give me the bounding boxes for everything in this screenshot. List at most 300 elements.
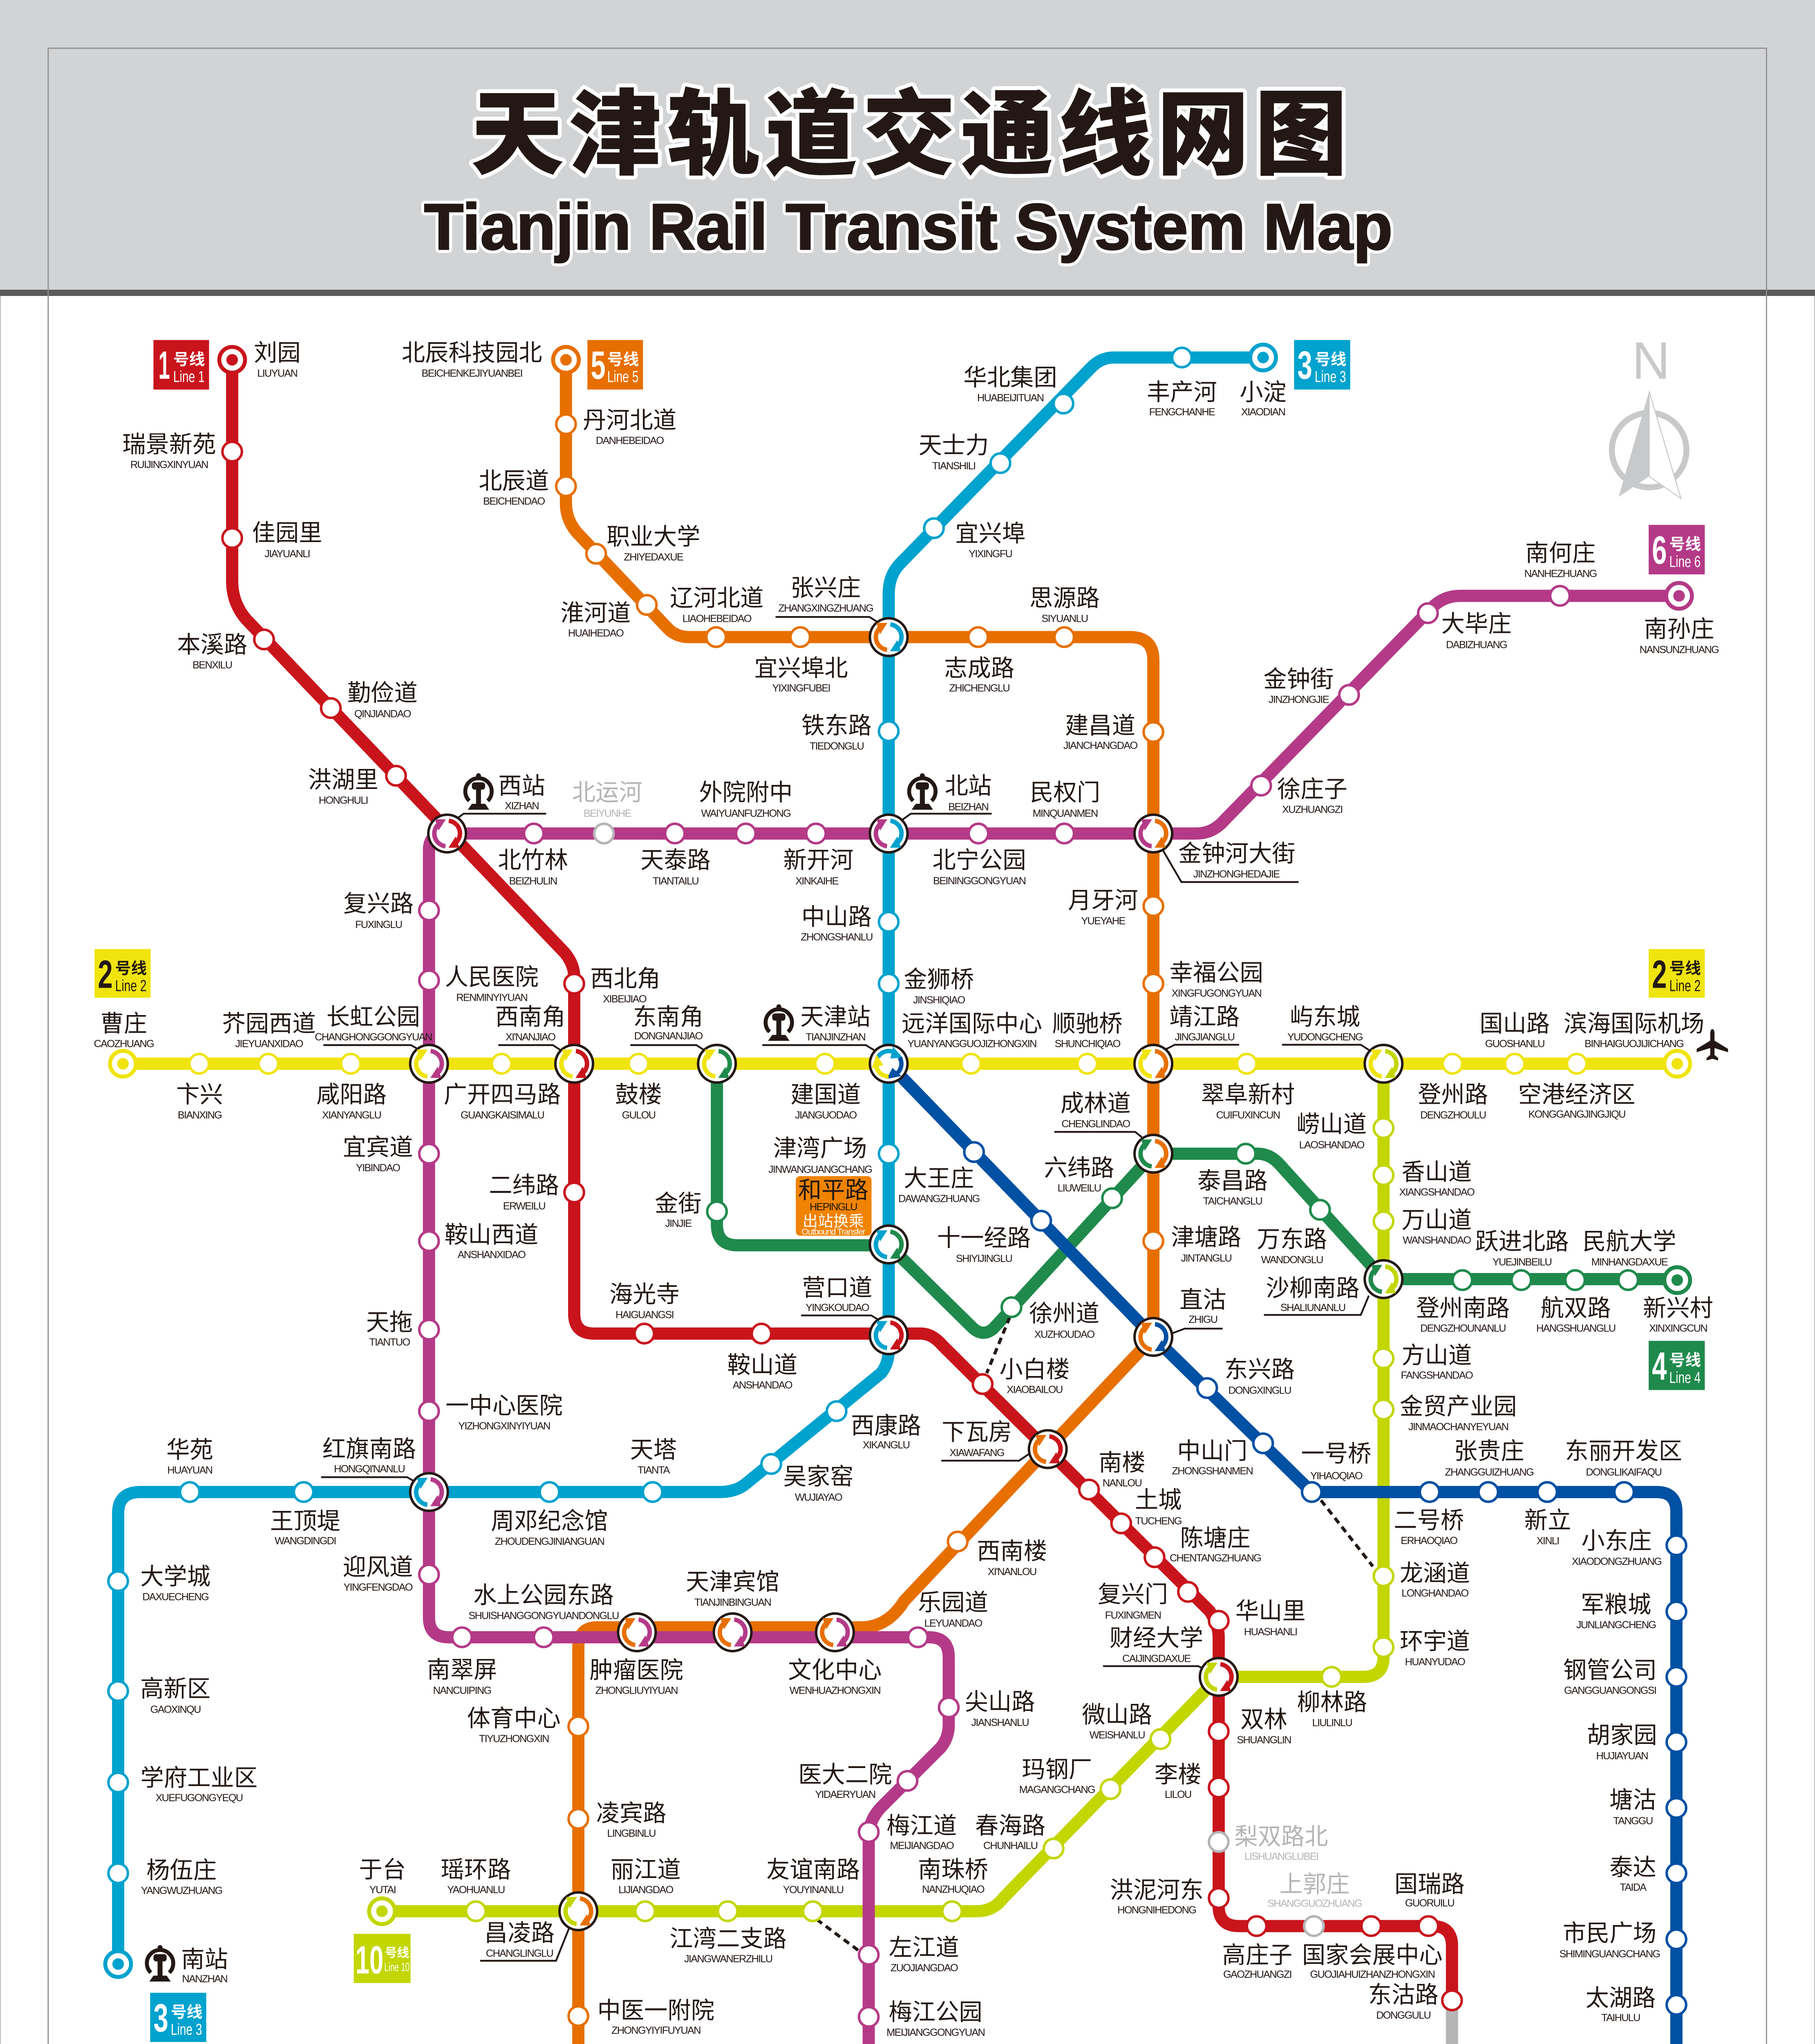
station: 淮河道: [560, 595, 656, 639]
station: 一中心医院: 一中心医院: [445, 1393, 563, 1419]
station: 大学城: DAXUECHENG: [142, 1591, 208, 1603]
station: 本溪路: BENXILU: [192, 659, 232, 671]
terminus: 刘园: LIUYUAN: [257, 368, 298, 379]
badge: line 2 left: [94, 949, 151, 998]
station: 远洋国际中心: [902, 1011, 1042, 1074]
station: 凌宾路: [568, 1800, 667, 1839]
station: 淮河道: 淮河道: [560, 600, 631, 626]
station: 建昌道: JIANCHANGDAO: [1063, 740, 1137, 751]
station: 徐庄子: 徐庄子: [1277, 776, 1347, 802]
station: 中医一附院: [568, 1998, 714, 2036]
badge: line 6 top: 6: [1652, 528, 1667, 572]
terminus: 曹庄: [94, 1011, 154, 1077]
terminus: 新兴村: [1643, 1267, 1713, 1334]
station: 大王庄: [898, 1142, 984, 1204]
station: 金钟街: JINZHONGJIE: [1269, 694, 1329, 706]
interchange: 文化中心: [788, 1614, 882, 1697]
interchange: 昌凌路: CHANGLINGLU: [486, 1948, 553, 1959]
station: 学府工业区: 学府工业区: [141, 1765, 257, 1791]
station: 北运河 (not open): [572, 780, 642, 843]
station: 南翠屏: NANCUIPING: [433, 1685, 491, 1697]
station: 高庄子: [1222, 1916, 1292, 1980]
station: 金街: JINJIE: [665, 1218, 692, 1229]
station: 国家会展中心: GUOJIAHUIZHANZHONGXIN: [1310, 1969, 1435, 1980]
interchange: 北站: [870, 773, 991, 852]
station: 梅江公园: 梅江公园: [889, 1999, 982, 2026]
station: 天士力: [919, 433, 1010, 473]
badge: line 2 left: 2: [98, 952, 113, 996]
station: 瑞景新苑: [122, 431, 242, 471]
station: 鞍山道: 鞍山道: [727, 1352, 797, 1378]
interchange: 和平路 with outbound-transfer tag: [796, 1176, 907, 1263]
station: 尖山路: JIANSHANLU: [971, 1717, 1029, 1728]
station: 华山里: [1209, 1598, 1306, 1638]
station: 南何庄: 南何庄: [1525, 540, 1596, 567]
terminus: 南站: 南站: [181, 1947, 228, 1973]
station: 东兴路: 东兴路: [1224, 1357, 1295, 1383]
terminus: 北辰科技园北: 北辰科技园北: [402, 340, 542, 366]
station: 佳园里: JIAYUANLI: [264, 548, 310, 560]
station: 微山路: WEISHANLU: [1090, 1730, 1145, 1741]
interchange: 金钟河大街: [1135, 815, 1298, 882]
interchange: 红旗南路: 红旗南路: [322, 1436, 416, 1462]
line 9 path: [888, 1064, 1676, 2044]
station: 周邓纪念馆: ZHOUDENGJINIANGUAN: [495, 1536, 604, 1547]
interchange: 红旗南路: [321, 1436, 448, 1511]
station: 丰产河: 丰产河: [1147, 379, 1217, 406]
station: 瑶环路: 瑶环路: [441, 1857, 511, 1883]
station: 万东路: [1257, 1200, 1330, 1266]
station: 医大二院: [798, 1762, 917, 1800]
station: 瑶环路: [441, 1857, 511, 1921]
terminus: 于台: YUTAI: [369, 1884, 396, 1896]
station: 登州南路: 登州南路: [1416, 1295, 1510, 1321]
station: 宜宾道: 宜宾道: [343, 1134, 413, 1161]
station: 梅江公园: MEIJIANGGONGYUAN: [886, 2027, 985, 2038]
interchange: 天津站: [762, 1004, 909, 1085]
station: 咸阳路: [316, 1054, 387, 1121]
interchange stations: [315, 575, 1402, 2044]
station: 洪泥河东: [1110, 1877, 1229, 1916]
station: 塘沽: [1609, 1787, 1686, 1827]
badge: line 3 top: Line 3: [1315, 368, 1346, 386]
interchange: 营口道: YINGKOUDAO: [806, 1302, 869, 1313]
interchange: 和平路 with outbound-transfer tag: Outbound Transfer: [802, 1227, 865, 1237]
station: 咸阳路: 咸阳路: [316, 1082, 387, 1108]
station: 国山路: [1479, 1011, 1550, 1074]
station: 南珠桥: 南珠桥: [918, 1857, 988, 1883]
line badges: [94, 340, 1705, 2044]
station: 西康路: XIKANGLU: [863, 1439, 910, 1451]
station: 柳林路: LIULINLU: [1312, 1717, 1352, 1729]
interchange: 西站: XIZHAN: [505, 800, 539, 812]
interchange: 天津站: 天津站: [800, 1004, 871, 1030]
station: 翠阜新村: [1201, 1054, 1295, 1121]
line 2 stations: [94, 1011, 1728, 1121]
station: 南珠桥: NANZHUQIAO: [922, 1884, 985, 1895]
station: 华北集团: HUABEIJITUAN: [977, 392, 1044, 404]
line 1 unopened section: [1450, 2000, 1454, 2044]
interchange: 张兴庄: 张兴庄: [790, 575, 861, 601]
station: 天士力: 天士力: [919, 433, 989, 459]
station: 鼓楼: [615, 1054, 662, 1121]
terminus: 小淀: [1240, 345, 1287, 418]
station: 二号桥: ERHAOQIAO: [1401, 1535, 1457, 1546]
line 9 stations: [898, 1142, 1689, 2044]
interchange: 财经大学: 财经大学: [1110, 1625, 1203, 1651]
station: 李楼: [1155, 1762, 1229, 1800]
station: 宜兴埠北: YIXINGFUBEI: [772, 682, 830, 694]
station: 宜宾道: [343, 1134, 439, 1174]
station: 天塔: 天塔: [630, 1437, 677, 1463]
station: 太湖路: TAIHULU: [1601, 2012, 1640, 2024]
station-outside transfer dashed links: [817, 1317, 1373, 1951]
station: 民航大学: 民航大学: [1582, 1228, 1676, 1255]
station: 万山道: WANSHANDAO: [1403, 1235, 1471, 1246]
badge: line 5 top: 5: [591, 343, 606, 388]
station: 张贵庄: [1445, 1438, 1533, 1502]
station: 中山路: 中山路: [801, 904, 872, 930]
station: 太湖路: [1585, 1985, 1686, 2024]
station: 小白楼: 小白楼: [999, 1357, 1070, 1383]
badge: line 2 right: Line 2: [1670, 977, 1701, 995]
station: 东沽路: [1368, 1982, 1462, 2021]
station: 土城: [1112, 1487, 1182, 1533]
badge: line 5 top: 号线: [607, 351, 639, 368]
station: 新立: 新立: [1524, 1508, 1571, 1534]
station: 天泰路: TIANTAILU: [653, 876, 698, 887]
station: 钢管公司: GANGGUANGONGSI: [1564, 1685, 1656, 1697]
station: 学府工业区: XUEFUGONGYEQU: [155, 1792, 243, 1804]
badge: line 3 top: 3: [1298, 343, 1312, 388]
station: 华苑: 华苑: [166, 1437, 213, 1463]
station: 水上公园东路: [468, 1582, 619, 1647]
station: 东兴路: DONGXINGLU: [1228, 1385, 1291, 1396]
station: 迎风道: 迎风道: [343, 1554, 413, 1580]
station: 天拖: [366, 1309, 439, 1348]
line 3 path: [118, 358, 1263, 1964]
interchange: 和平路 with outbound-transfer tag: 和平路: [798, 1177, 868, 1204]
station: 海光寺: 海光寺: [609, 1281, 680, 1307]
station: 勤俭道: QINJIANDAO: [354, 708, 411, 719]
interchange: 和平路 with outbound-transfer tag: HEPINGLU: [810, 1201, 857, 1213]
station: 职业大学: ZHIYEDAXUE: [624, 551, 683, 563]
station: 丹河北道: DANHEBEIDAO: [596, 435, 664, 446]
terminus: 南站: [105, 1945, 228, 1985]
station: 钢管公司: 钢管公司: [1563, 1657, 1657, 1683]
station: 复兴路: FUXINGLU: [355, 919, 402, 930]
station: 津湾广场: [768, 1136, 898, 1175]
station: 思源路: 思源路: [1029, 585, 1100, 612]
station: 洪湖里: 洪湖里: [308, 767, 378, 793]
station: 幸福公园: XINGFUGONGYUAN: [1172, 988, 1261, 999]
station: 国家会展中心: 国家会展中心: [1302, 1942, 1443, 1968]
station: 塘沽: 塘沽: [1609, 1787, 1656, 1813]
station: 勤俭道: [321, 680, 418, 719]
badge: line 2 right: 2: [1652, 952, 1667, 996]
terminus: 南孙庄: [1640, 583, 1719, 656]
interchange: 北站: 北站: [945, 773, 991, 799]
station: 新开河: XINKAIHE: [795, 876, 838, 887]
station: 金街: [655, 1190, 727, 1229]
station: 职业大学: [586, 524, 700, 563]
station: 梅江道: MEIJIANGDAO: [890, 1840, 954, 1851]
station: 柳林路: [1297, 1667, 1367, 1729]
station: 上郭庄 (not open): SHANGGUOZHUANG: [1267, 1898, 1362, 1909]
interchange: 东南角: [630, 1004, 736, 1083]
terminus: 曹庄: 曹庄: [100, 1011, 147, 1037]
interchange: 文化中心: 文化中心: [788, 1657, 882, 1683]
station: 远洋国际中心: 远洋国际中心: [902, 1011, 1042, 1037]
station: 徐庄子: XUZHUANGZI: [1282, 804, 1343, 815]
station: 北竹林: BEIZHULIN: [509, 876, 557, 887]
station: 民权门: [1030, 780, 1100, 843]
badge: line 1 top: 号线: [173, 351, 205, 368]
station: 新立: XINLI: [1537, 1535, 1559, 1547]
station: 南何庄: NANHEZHUANG: [1524, 568, 1596, 580]
station: 一中心医院: YIZHONGXINYIYUAN: [458, 1420, 550, 1432]
station: 天拖: 天拖: [366, 1309, 413, 1336]
station: 周邓纪念馆: 周邓纪念馆: [491, 1508, 608, 1535]
station: 华山里: HUASHANLI: [1244, 1626, 1297, 1638]
station: 王顶堤: WANGDINGDI: [275, 1535, 336, 1547]
station: 津塘路: [1144, 1224, 1241, 1264]
station: 玛钢厂: [1019, 1757, 1120, 1799]
station: 六纬路: LIUWEILU: [1057, 1183, 1101, 1194]
station: 东沽路: DONGGULU: [1376, 2010, 1430, 2021]
station: 小东庄: XIAODONGZHUANG: [1572, 1556, 1661, 1567]
station: 东沽路: 东沽路: [1368, 1982, 1439, 2008]
terminus: 小淀: XIAODIAN: [1241, 406, 1285, 418]
station: 高庄子: GAOZHUANGZI: [1223, 1969, 1291, 1980]
terminus: 北辰科技园北: [402, 340, 579, 379]
station: 广开四马路: 广开四马路: [444, 1082, 561, 1108]
station: 江湾二支路: 江湾二支路: [669, 1926, 787, 1952]
station: 建国道: JIANGUODAO: [795, 1109, 857, 1121]
terminus: 小淀: 小淀: [1240, 379, 1287, 406]
station: 香山道: [1374, 1159, 1475, 1198]
station: 铁东路: [801, 713, 898, 752]
badge: line 6 top: Line 6: [1670, 553, 1701, 571]
station: 一中心医院: [419, 1393, 563, 1432]
station: 军粮城: 军粮城: [1581, 1591, 1651, 1618]
station: 登州路: 登州路: [1418, 1082, 1488, 1108]
station: 梨双路北 (not open): [1209, 1824, 1328, 1862]
interchange: 下瓦房: 下瓦房: [942, 1419, 1012, 1446]
line 5 path: [566, 360, 1153, 2044]
station: 登州路: [1418, 1054, 1488, 1121]
station: 左江道: ZUOJIANGDAO: [891, 1962, 958, 1974]
interchange: 西站: [428, 773, 546, 852]
station: 国家会展中心: [1302, 1916, 1443, 1980]
station: 大学城: [108, 1564, 210, 1603]
station: 鼓楼: GULOU: [622, 1109, 656, 1121]
line 4 path: [717, 1064, 1677, 1333]
station: 微山路: 微山路: [1082, 1702, 1152, 1728]
line 2 path: [123, 1062, 1677, 1065]
station: 西南楼: XI'NANLOU: [988, 1566, 1036, 1578]
badge: line 2 right: [1649, 949, 1705, 998]
badge: line 4: 号线: [1670, 1352, 1701, 1369]
station: 徐庄子: [1251, 776, 1347, 815]
station: 鞍山西道: 鞍山西道: [445, 1222, 538, 1248]
terminus: 新兴村: XINXINGCUN: [1649, 1322, 1707, 1334]
badge: line 5 top: [587, 340, 643, 390]
station: 佳园里: [222, 520, 322, 560]
station: 水上公园东路: SHUISHANGGONGYUANDONGLU: [468, 1610, 619, 1622]
station: 高新区: GAOXINQU: [150, 1704, 201, 1715]
station: 乐园道: LEYUANDAO: [924, 1618, 982, 1629]
station: 建昌道: [1063, 713, 1163, 751]
badge: line 3 top: 号线: [1315, 351, 1346, 368]
station: 友谊南路: YOUYINANLU: [783, 1884, 844, 1896]
station: 方山道: 方山道: [1401, 1342, 1472, 1369]
station: 医大二院: 医大二院: [798, 1762, 892, 1788]
badge: line 4: Line 4: [1670, 1369, 1701, 1387]
station: 中山路: ZHONGSHANLU: [801, 932, 873, 943]
station: 北竹林: 北竹林: [498, 847, 568, 874]
line 1 path: [232, 360, 1452, 2000]
terminus: 于台: [359, 1857, 406, 1924]
line 5 stations: [402, 340, 1263, 2044]
station: 梅江道: 梅江道: [886, 1813, 957, 1839]
station: 中山路: [801, 904, 898, 943]
station: 月牙河: 月牙河: [1068, 888, 1138, 914]
interchange: 肿瘤医院: ZHONGLIUYIYUAN: [595, 1685, 678, 1697]
station: 方山道: [1374, 1342, 1473, 1381]
station: 志成路: ZHICHENGLU: [949, 682, 1009, 694]
badge: line 3 bottom: Line 3: [171, 2021, 202, 2039]
terminus: 南站: NANZHAN: [182, 1973, 227, 1985]
station: 医大二院: YIDAERYUAN: [815, 1789, 875, 1800]
interchange: 营口道: 营口道: [802, 1275, 872, 1301]
station: 香山道: XIANGSHANDAO: [1399, 1186, 1475, 1198]
station: 二号桥: 二号桥: [1394, 1508, 1464, 1534]
station: 东丽开发区: 东丽开发区: [1565, 1438, 1682, 1464]
interchange: 天津宾馆: 天津宾馆: [686, 1569, 779, 1595]
station: 杨伍庄: YANGWUZHUANG: [141, 1885, 222, 1896]
station: 南珠桥: [918, 1857, 988, 1921]
icon: airplane: [1697, 1029, 1728, 1060]
station: 辽河北道: LIAOHEBEIDAO: [683, 613, 752, 624]
station: 微山路: [1082, 1702, 1170, 1749]
terminus: 刘园: [219, 340, 301, 379]
station: 卞兴: 卞兴: [176, 1082, 223, 1108]
station: 民航大学: [1582, 1228, 1676, 1290]
station: 华苑: HUAYUAN: [167, 1465, 213, 1476]
interchange: 昌凌路: 昌凌路: [484, 1920, 555, 1946]
station: 徐州道: [1002, 1298, 1099, 1340]
station: 梨双路北 (not open): LISHUANGLUBEI: [1244, 1851, 1318, 1862]
interchange: 肿瘤医院: 肿瘤医院: [590, 1657, 683, 1683]
station: 瑞景新苑: RUIJINGXINYUAN: [130, 459, 208, 471]
station: 一号桥: YIHAOQIAO: [1310, 1470, 1363, 1482]
station: 高新区: 高新区: [140, 1676, 210, 1702]
header band: [0, 0, 1815, 290]
station: 徐州道: XUZHOUDAO: [1034, 1329, 1094, 1340]
station: 小东庄: [1572, 1528, 1686, 1567]
line 10 stations: [359, 1112, 1517, 1965]
terminus: 南孙庄: NANSUNZHUANG: [1640, 644, 1719, 656]
station: 北宁公园: 北宁公园: [932, 847, 1026, 874]
station: 西北角: [564, 966, 660, 1005]
station: 大王庄: 大王庄: [904, 1165, 974, 1192]
station: 杨伍庄: [108, 1857, 222, 1896]
station: 鞍山道: [727, 1324, 797, 1391]
badge: line 3 bottom: 3: [153, 1996, 168, 2040]
station: 复兴门: [1098, 1581, 1198, 1621]
badge: line 3 bottom: [150, 1993, 206, 2042]
terminus: 曹庄: CAOZHUANG: [94, 1038, 154, 1050]
station: 洪泥河东: 洪泥河东: [1110, 1877, 1204, 1903]
interchange: 下瓦房: XIAWAFANG: [949, 1447, 1004, 1459]
station: 淮河道: HUAIHEDAO: [568, 628, 624, 639]
terminus: 滨海国际机场: [1564, 1011, 1704, 1077]
interchange: 天津宾馆: TIANJINBINGUAN: [694, 1597, 771, 1608]
station: 外院附中: WAIYUANFUZHONG: [701, 808, 790, 819]
station: 春海路: CHUNHAILU: [983, 1840, 1038, 1851]
station: 李楼: 李楼: [1155, 1762, 1202, 1788]
title: Chinese: 天津轨道交通线网图: [471, 83, 1347, 186]
station: 中医一附院: ZHONGYIYIFUYUAN: [611, 2025, 700, 2036]
station: 宜宾道: YIBINDAO: [356, 1162, 400, 1174]
station: 新立: [1524, 1482, 1571, 1547]
station: 宜兴埠: [924, 518, 1025, 560]
station: 龙涵道: 龙涵道: [1400, 1560, 1470, 1587]
station: 江湾二支路: JIANGWANERZHILU: [684, 1953, 772, 1965]
station: 南翠屏: [427, 1627, 497, 1697]
station: 一号桥: 一号桥: [1301, 1441, 1371, 1467]
station: 方山道: FANGSHANDAO: [1401, 1369, 1473, 1381]
station: 王顶堤: [270, 1482, 340, 1547]
station: 航双路: 航双路: [1541, 1295, 1611, 1321]
station: 外院附中: 外院附中: [699, 780, 792, 806]
station: 北运河 (not open): BEIYUNHE: [584, 808, 631, 819]
station: 迎风道: YINGFENGDAO: [343, 1582, 413, 1593]
station: 泰达: 泰达: [1609, 1855, 1656, 1881]
station: 胡家园: 胡家园: [1587, 1722, 1657, 1748]
station: 幸福公园: 幸福公园: [1170, 960, 1263, 986]
interchange: 金钟河大街: 金钟河大街: [1178, 841, 1296, 867]
station: 辽河北道: 辽河北道: [670, 585, 763, 612]
station: 宜兴埠: 宜兴埠: [955, 520, 1025, 547]
station: 金贸产业园: JINMAOCHANYEYUAN: [1408, 1421, 1508, 1432]
interchange: 屿东城: YUDONGCHENG: [1287, 1031, 1363, 1043]
station: 万东路: WANDONGLU: [1261, 1254, 1323, 1266]
station: 国瑞路: [1394, 1871, 1465, 1936]
interchange: 天津站: TIANJINZHAN: [806, 1031, 865, 1043]
station: 左江道: [859, 1934, 959, 1974]
station: 东丽开发区: [1565, 1438, 1682, 1502]
station: 天拖: TIANTUO: [369, 1337, 410, 1348]
station: 迎风道: [343, 1554, 439, 1593]
title: English: Tianjin Rail Transit System Map: [424, 191, 1392, 263]
badge: line 6 top: [1649, 525, 1705, 574]
station: 王顶堤: 王顶堤: [270, 1508, 340, 1535]
station: 市民广场: [1560, 1921, 1686, 1960]
station: 双林: SHUANGLIN: [1237, 1735, 1291, 1746]
station: 登州南路: [1416, 1271, 1510, 1334]
station: 辽河北道: [670, 585, 763, 647]
station: 西北角: 西北角: [590, 966, 660, 992]
station: 泰昌路: TAICHANGLU: [1203, 1195, 1262, 1207]
station: 金狮桥: 金狮桥: [904, 967, 974, 993]
station: 环宇道: HUANYUDAO: [1405, 1656, 1465, 1668]
station: 梅江道: [859, 1813, 957, 1851]
station: 卞兴: BIANXING: [178, 1109, 222, 1121]
station: 跃进北路: 跃进北路: [1475, 1228, 1569, 1255]
station: 海光寺: HAIGUANGSI: [615, 1309, 674, 1321]
